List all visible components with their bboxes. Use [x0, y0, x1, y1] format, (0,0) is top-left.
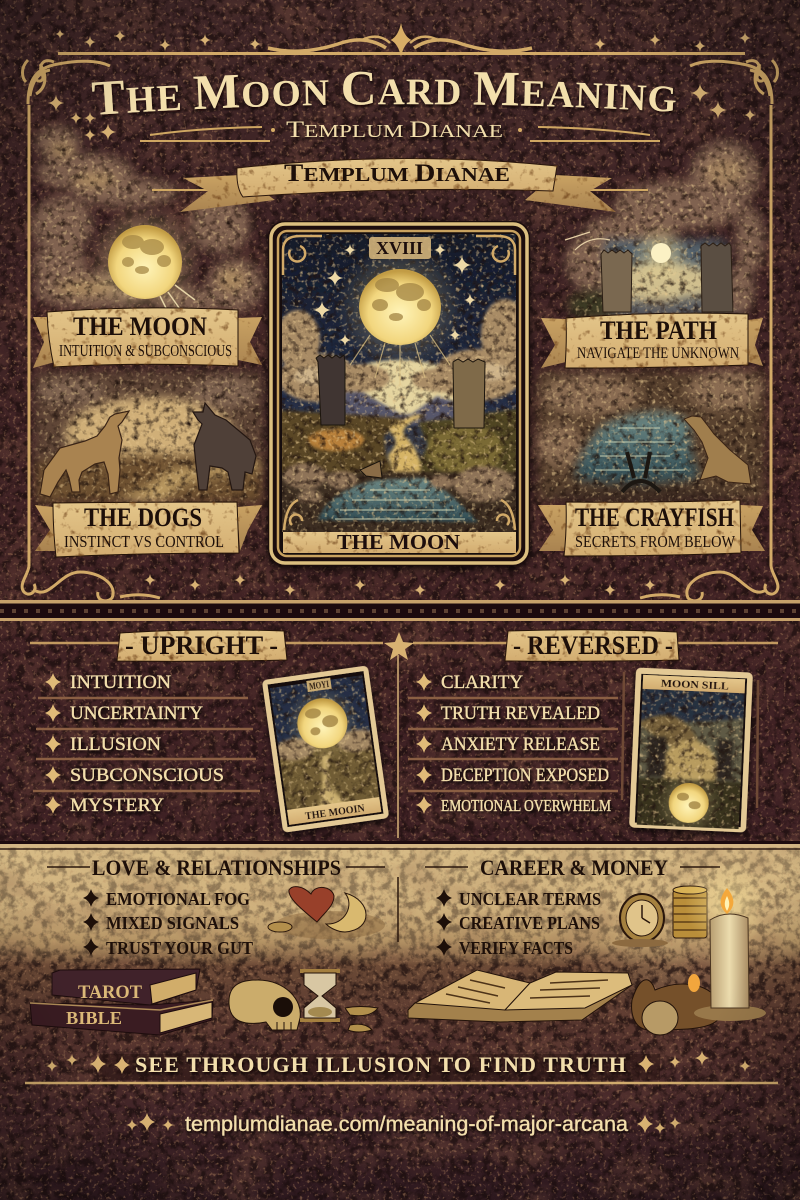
list: upright keywords: UNCERTAINTY [70, 703, 203, 724]
list: upright keywords [33, 672, 260, 816]
callout: see through illusion [25, 1050, 778, 1083]
card number [369, 237, 431, 259]
heading: LOVE & RELATIONSHIPS [92, 855, 341, 880]
ornament: top centre star [268, 23, 532, 57]
illustration: dogs howling at dusk [36, 372, 262, 502]
card corner ornaments [283, 236, 515, 530]
list: CREATIVE PLANS [459, 913, 600, 933]
icon: hourglass [300, 971, 378, 1032]
icon: skull [229, 980, 300, 1030]
icon: distant moon [651, 243, 671, 263]
label: the crayfish [538, 500, 765, 556]
list: MIXED SIGNALS [106, 913, 239, 933]
list: upright keywords: INTUITION [70, 672, 171, 693]
list [459, 889, 601, 958]
card caption: THE MOON [337, 530, 460, 554]
panel: love and relationships [47, 855, 385, 958]
illustration: upper left clouds [32, 126, 263, 312]
label: the path [541, 313, 763, 368]
heading: upright: - UPRIGHT - [125, 631, 278, 660]
icon: coin stack [673, 886, 707, 938]
footer url: templumdianae.com/meaning-of-major-arcana [185, 1113, 628, 1136]
heading: CAREER & MONEY [480, 855, 668, 880]
icon: howling wolf [684, 416, 751, 484]
list: EMOTIONAL FOG [106, 889, 250, 909]
list [106, 889, 253, 958]
icon: dark dog [193, 403, 256, 490]
card scene [282, 234, 516, 532]
label: the crayfish: SECRETS FROM BELOW [575, 532, 736, 551]
divider: rule above parchment [0, 841, 800, 850]
card caption [283, 530, 516, 554]
icon: centre star with divider [384, 632, 414, 838]
illustration: towers and distant moon [565, 141, 764, 319]
list: reversed keywords [408, 672, 758, 815]
icon: pocket watch [612, 894, 668, 947]
card number: XVIII [376, 238, 423, 258]
card: reversed moon [629, 668, 753, 837]
ornament: bottom corners [22, 566, 778, 601]
heading: reversed: - REVERSED - [513, 631, 673, 660]
card: upright moon: THE MOOIN [304, 802, 365, 822]
illustration: river, wolf and crayfish [536, 370, 764, 503]
card: upright moon [262, 665, 389, 833]
stars [313, 244, 476, 346]
icon: basket on the bank [360, 461, 382, 478]
list: reversed keywords: ANXIETY RELEASE [441, 734, 600, 755]
label: the moon: INTUITION & SUBCONSCIOUS [59, 341, 232, 360]
icon: left tower [316, 355, 345, 425]
ornate frame [22, 23, 778, 601]
banner: Templum Dianae ribbon: TEMPLUM DIANAE [284, 160, 510, 187]
icon: heart and crescent [268, 887, 385, 939]
subtitle with flanking rules: TEMPLUM D IANAE [286, 117, 503, 142]
icon: tan dog [40, 411, 129, 497]
heading: upright [30, 630, 383, 661]
list: UNCLEAR TERMS [459, 889, 601, 909]
icon: right tower [453, 359, 485, 428]
bullets [436, 889, 452, 956]
list: reversed keywords: TRUTH REVEALED [441, 703, 600, 724]
label: the path: NAVIGATE THE UNKNOWN [577, 345, 739, 362]
icon: lightning cloud trace [565, 232, 610, 250]
label: the moon: THE MOON [73, 312, 207, 341]
icon: right watchtower [701, 243, 733, 312]
moon [340, 257, 460, 362]
panel: career and money [425, 855, 720, 958]
scene backdrop [536, 370, 764, 503]
heading: reversed [413, 630, 778, 661]
list: reversed keywords: DECEPTION EXPOSED [441, 765, 609, 786]
icon: books tarot and bible: BIBLE [66, 1008, 122, 1028]
list: upright keywords: SUBCONSCIOUS [70, 765, 224, 786]
icon: full moon, left panel [87, 204, 203, 320]
icon: crayfish [622, 452, 660, 492]
card: upright moon: MOYI [308, 679, 330, 692]
title: THE MOON CARD MEANING [91, 72, 678, 118]
list: reversed keywords: CLARITY [441, 672, 523, 693]
card: reversed moon: MOON SILL [661, 678, 729, 693]
decoration: sparkle bands [48, 29, 756, 596]
list: upright keywords: MYSTERY [70, 795, 164, 816]
subtitle with flanking rules [140, 117, 660, 142]
section divider: diamond band [0, 600, 800, 621]
icon: pouch, compass and small flame [632, 974, 766, 1035]
water highlights [335, 490, 465, 519]
icon: left watchtower [601, 250, 632, 312]
water highlights [595, 428, 685, 470]
label: the dogs: INSTINCT VS CONTROL [64, 532, 224, 551]
list: VERIFY FACTS [459, 938, 573, 958]
ornament: top corners [22, 60, 778, 104]
label: the path: THE PATH [600, 316, 717, 345]
icon: books tarot and bible [30, 969, 213, 1035]
banner: Templum Dianae ribbon [152, 158, 648, 212]
list: TRUST YOUR GUT [106, 938, 253, 958]
central tarot card [268, 221, 530, 566]
icon: candle with flame [685, 863, 769, 1008]
label: the crayfish: THE CRAYFISH [575, 503, 734, 532]
bullets [83, 889, 99, 956]
icon: open book [408, 970, 632, 1022]
list: upright keywords: ILLUSION [70, 734, 161, 755]
callout: see through illusion: SEE THROUGH ILLUSION TO FIND TRUTH [135, 1052, 626, 1077]
rays [350, 335, 450, 385]
label: the moon [33, 308, 262, 368]
scene backdrop [36, 372, 262, 502]
list: reversed keywords: EMOTIONAL OVERWHELM [441, 796, 611, 815]
divider: vertical parchment rule [397, 877, 399, 942]
label: the dogs: THE DOGS [84, 503, 202, 532]
icon: books tarot and bible: TAROT [78, 982, 142, 1003]
scene backdrop [566, 141, 764, 319]
label: the dogs [35, 502, 262, 557]
